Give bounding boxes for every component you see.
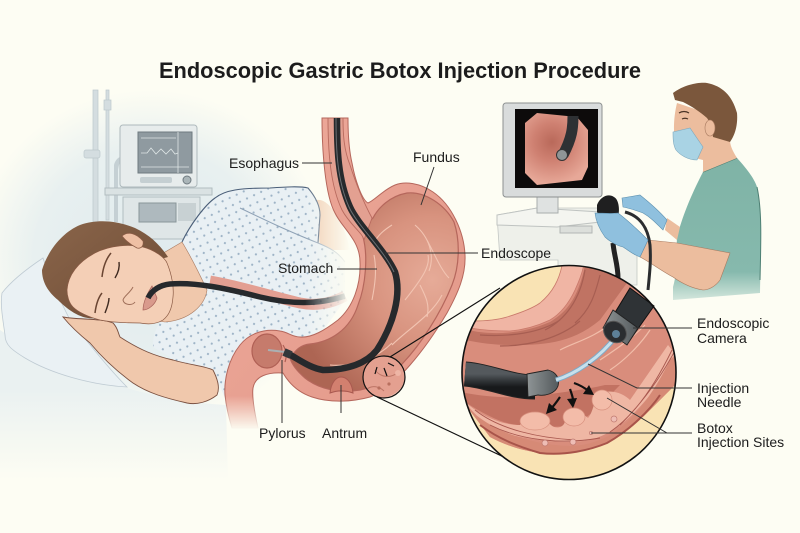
- labels: Needle: [697, 394, 742, 410]
- magnified inset: [461, 264, 677, 480]
- label leader lines: [282, 163, 692, 433]
- patient arm: [63, 317, 218, 404]
- dots: [542, 416, 617, 446]
- stomach inner cavity: [290, 193, 458, 391]
- labels: Endoscopic: [697, 315, 769, 331]
- antrum: [330, 377, 353, 393]
- injection bumps: [520, 390, 612, 430]
- labels: Esophagus: [229, 155, 299, 171]
- upper lining: [472, 266, 584, 332]
- inset camera: [599, 288, 654, 347]
- labels: Fundus: [413, 149, 460, 165]
- esophagus lumen: [328, 118, 372, 240]
- lower fold: [460, 385, 620, 427]
- title: Endoscopic Gastric Botox Injection Procedure: [159, 58, 641, 83]
- bed sheet: [0, 330, 228, 480]
- monitor on cart: [497, 103, 637, 285]
- iv pole: [84, 90, 111, 222]
- labels: Camera: [697, 330, 747, 346]
- patient head: [42, 221, 173, 324]
- endoscope from patient mouth: [148, 281, 345, 304]
- upper dark fold: [468, 268, 626, 345]
- injection needle: [556, 335, 617, 380]
- patient body in gown: [153, 187, 350, 398]
- labels: Injection: [697, 380, 749, 396]
- labels: Stomach: [278, 260, 333, 276]
- endoscope through stomach: [268, 118, 397, 370]
- labels: Pylorus: [259, 425, 306, 441]
- vital signs monitor: [105, 125, 212, 239]
- inset arrows: [546, 383, 594, 414]
- pylorus: [252, 334, 286, 368]
- muscle layer: [474, 356, 674, 452]
- connector lines: [377, 288, 510, 460]
- small detail circle: [362, 356, 406, 402]
- labels: Antrum: [322, 425, 367, 441]
- doctor: [595, 83, 761, 300]
- labels: [229, 149, 784, 450]
- labels: Endoscope: [481, 245, 551, 261]
- inset endoscope tip: [527, 370, 559, 397]
- mucosa ridge: [465, 345, 676, 442]
- pillow: [1, 258, 127, 387]
- tissue wall: [462, 267, 674, 452]
- labels: Injection Sites: [697, 434, 784, 450]
- patient neck: [150, 242, 207, 322]
- labels: Botox: [697, 420, 733, 436]
- stomach: [225, 118, 465, 428]
- hospital room wash: [0, 90, 328, 426]
